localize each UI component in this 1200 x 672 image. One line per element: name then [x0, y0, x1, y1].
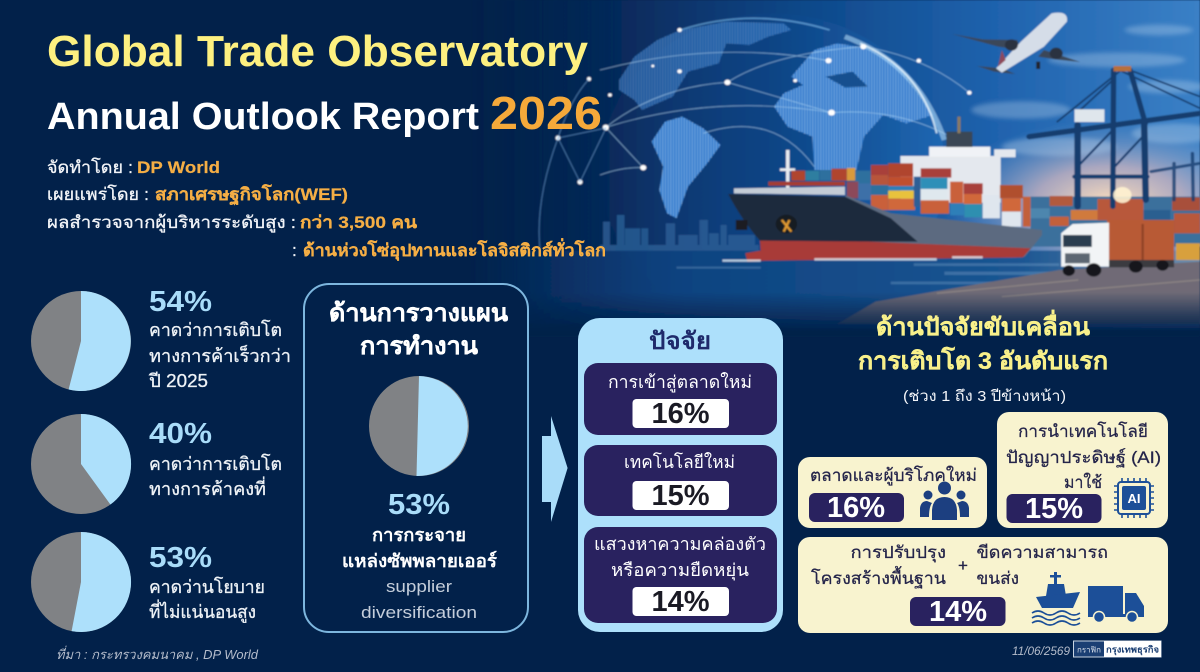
panel heading: [329, 300, 509, 360]
badge 14%: [910, 596, 1006, 628]
stat: 54% faster growth: [31, 286, 291, 391]
English label: [361, 578, 477, 622]
panel heading: ปัจจัย: [649, 328, 711, 355]
heading: top 3 growth drivers: [858, 309, 1108, 405]
report credits: กว่า 3,500 คน: [300, 213, 417, 232]
heading: top 3 growth drivers: การเติบโต 3 อันดับแรก: [858, 346, 1108, 375]
English label: supplier: [386, 578, 453, 596]
prepared by: จัดทำโดย :: [47, 157, 133, 177]
card: AI adoption: [997, 412, 1168, 528]
icon: AI chip: AI: [1128, 491, 1140, 506]
extra network nodes: [539, 77, 608, 250]
report credits: สภาเศรษฐกิจโลก(WEF): [155, 184, 348, 206]
factor: agility and resilience: [584, 527, 777, 623]
description: [149, 576, 265, 623]
report credits: [47, 157, 606, 261]
factor: agility and resilience: 14%: [651, 586, 710, 618]
description: คาดว่านโยบาย: [149, 576, 265, 597]
card: infrastructure and logistics capacity: โครงสร้างพื้นฐาน: [811, 566, 946, 589]
pie chart 54%: [31, 291, 131, 391]
factor: agility and resilience: หรือความยืดหยุ่น: [611, 560, 749, 581]
badge 16%: [809, 492, 904, 524]
panel heading: การทำงาน: [360, 333, 479, 360]
factor: new technology: เทคโนโลยีใหม่: [624, 452, 735, 472]
card: infrastructure and logistics capacity: ขนส่ง: [976, 569, 1019, 588]
airplane: [952, 13, 1080, 74]
report credits: ด้านห่วงโซ่อุปทานและโลจิสติกส์ทั่วโลก: [303, 238, 606, 261]
factor: new markets: การเข้าสู่ตลาดใหม่: [608, 372, 752, 393]
stat: 53% policy uncertainty: [31, 532, 265, 632]
publisher logo: [1074, 641, 1161, 657]
published by: เผยแพร่โดย :: [47, 184, 149, 204]
hero image: globe, ship, plane, port: [470, 0, 1200, 336]
badge 14%: 14%: [929, 596, 987, 628]
arrow: [542, 416, 568, 522]
pie chart 40%: [31, 414, 131, 514]
badge 16%: 16%: [827, 492, 885, 524]
description: คาดว่าการเติบโต: [149, 319, 282, 340]
survey scope: :: [292, 241, 297, 260]
card: infrastructure and logistics capacity: ขีดความสามารถ: [976, 543, 1108, 562]
description: ทางการค้าคงที่: [149, 476, 266, 499]
crane cabin: [1075, 109, 1104, 122]
crane: [1029, 70, 1200, 207]
icon: AI chip: [1114, 478, 1154, 518]
value 54%: 54%: [149, 286, 212, 318]
factor: agility and resilience: แสวงหาความคล่องตัว: [594, 534, 766, 554]
panel: operational planning: [304, 284, 528, 632]
description: ทางการค้าเร็วกว่า: [149, 344, 291, 366]
value 40%: 40%: [149, 418, 212, 450]
Thai label: [342, 525, 497, 571]
badge 15%: 15%: [1025, 493, 1083, 525]
value 53%: 53%: [388, 489, 450, 521]
subheading: (ช่วง 1 ถึง 3 ปีข้างหน้า): [903, 388, 1066, 405]
Thai label: การกระจาย: [372, 525, 466, 545]
port containers: [1031, 196, 1200, 247]
heading: top 3 growth drivers: ด้านปัจจัยขับเคลื่อน: [876, 309, 1091, 341]
globe: [599, 13, 972, 327]
water: [470, 251, 1200, 324]
title: [47, 27, 602, 139]
English label: diversification: [361, 604, 477, 622]
publisher logo: กรุงเทพธุรกิจ: [1106, 644, 1159, 656]
factor: new technology: [584, 445, 777, 516]
clouds: [971, 25, 1200, 156]
title line 2: Annual Outlook Report: [47, 96, 479, 138]
title line 1: Global Trade Observatory: [47, 27, 589, 76]
description: ปี 2025: [149, 371, 208, 391]
bottom fade of hero image: [470, 292, 1200, 336]
source note: ที่มา : กระทรวงคมนาคม , DP World: [56, 645, 259, 662]
description: ที่ไม่แน่นอนสูง: [149, 599, 256, 623]
description: [149, 319, 291, 391]
publisher logo: กราฟิก: [1077, 646, 1101, 654]
factor: new technology: 15%: [651, 480, 710, 512]
ship: [722, 117, 1042, 262]
card: new markets and consumers: ตลาดและผู้บริโภคใหม่: [810, 465, 977, 486]
value 53%: 53%: [149, 542, 212, 574]
truck: [1061, 220, 1200, 277]
skyline: [600, 215, 759, 251]
pie chart 53%: [31, 532, 131, 632]
description: [149, 453, 282, 499]
card: infrastructure and logistics capacity: การปรับปรุง: [850, 543, 946, 563]
icon: truck: [1088, 586, 1144, 622]
report credits: DP World: [137, 158, 220, 177]
factor: new markets: [584, 363, 777, 435]
pier ground: [837, 262, 1200, 324]
card: AI adoption: มาใช้: [1064, 472, 1102, 492]
pie chart 53%: [369, 376, 469, 476]
factor: new markets: 16%: [651, 398, 710, 430]
title year: 2026: [490, 87, 602, 139]
icon: people: [920, 482, 969, 520]
panel heading: ด้านการวางแผน: [329, 300, 509, 327]
badge 15%: [1006, 493, 1102, 525]
card: infrastructure and logistics capacity: [798, 537, 1168, 633]
icon: ship: [1032, 572, 1080, 625]
Thai label: แหล่งซัพพลายเออร์: [342, 550, 497, 571]
stat: 40% stable growth: [31, 414, 282, 514]
panel: factors: [578, 318, 783, 632]
description: คาดว่าการเติบโต: [149, 453, 282, 474]
card: new markets and consumers: [798, 457, 987, 528]
card: AI adoption: การนำเทคโนโลยี: [1018, 421, 1148, 441]
date: 11/06/2569: [1012, 646, 1071, 658]
survey respondents: ผลสำรวจจากผู้บริหารระดับสูง :: [47, 213, 296, 233]
card: AI adoption: ปัญญาประดิษฐ์ (AI): [1006, 448, 1161, 468]
card: infrastructure and logistics capacity: +: [958, 556, 968, 575]
